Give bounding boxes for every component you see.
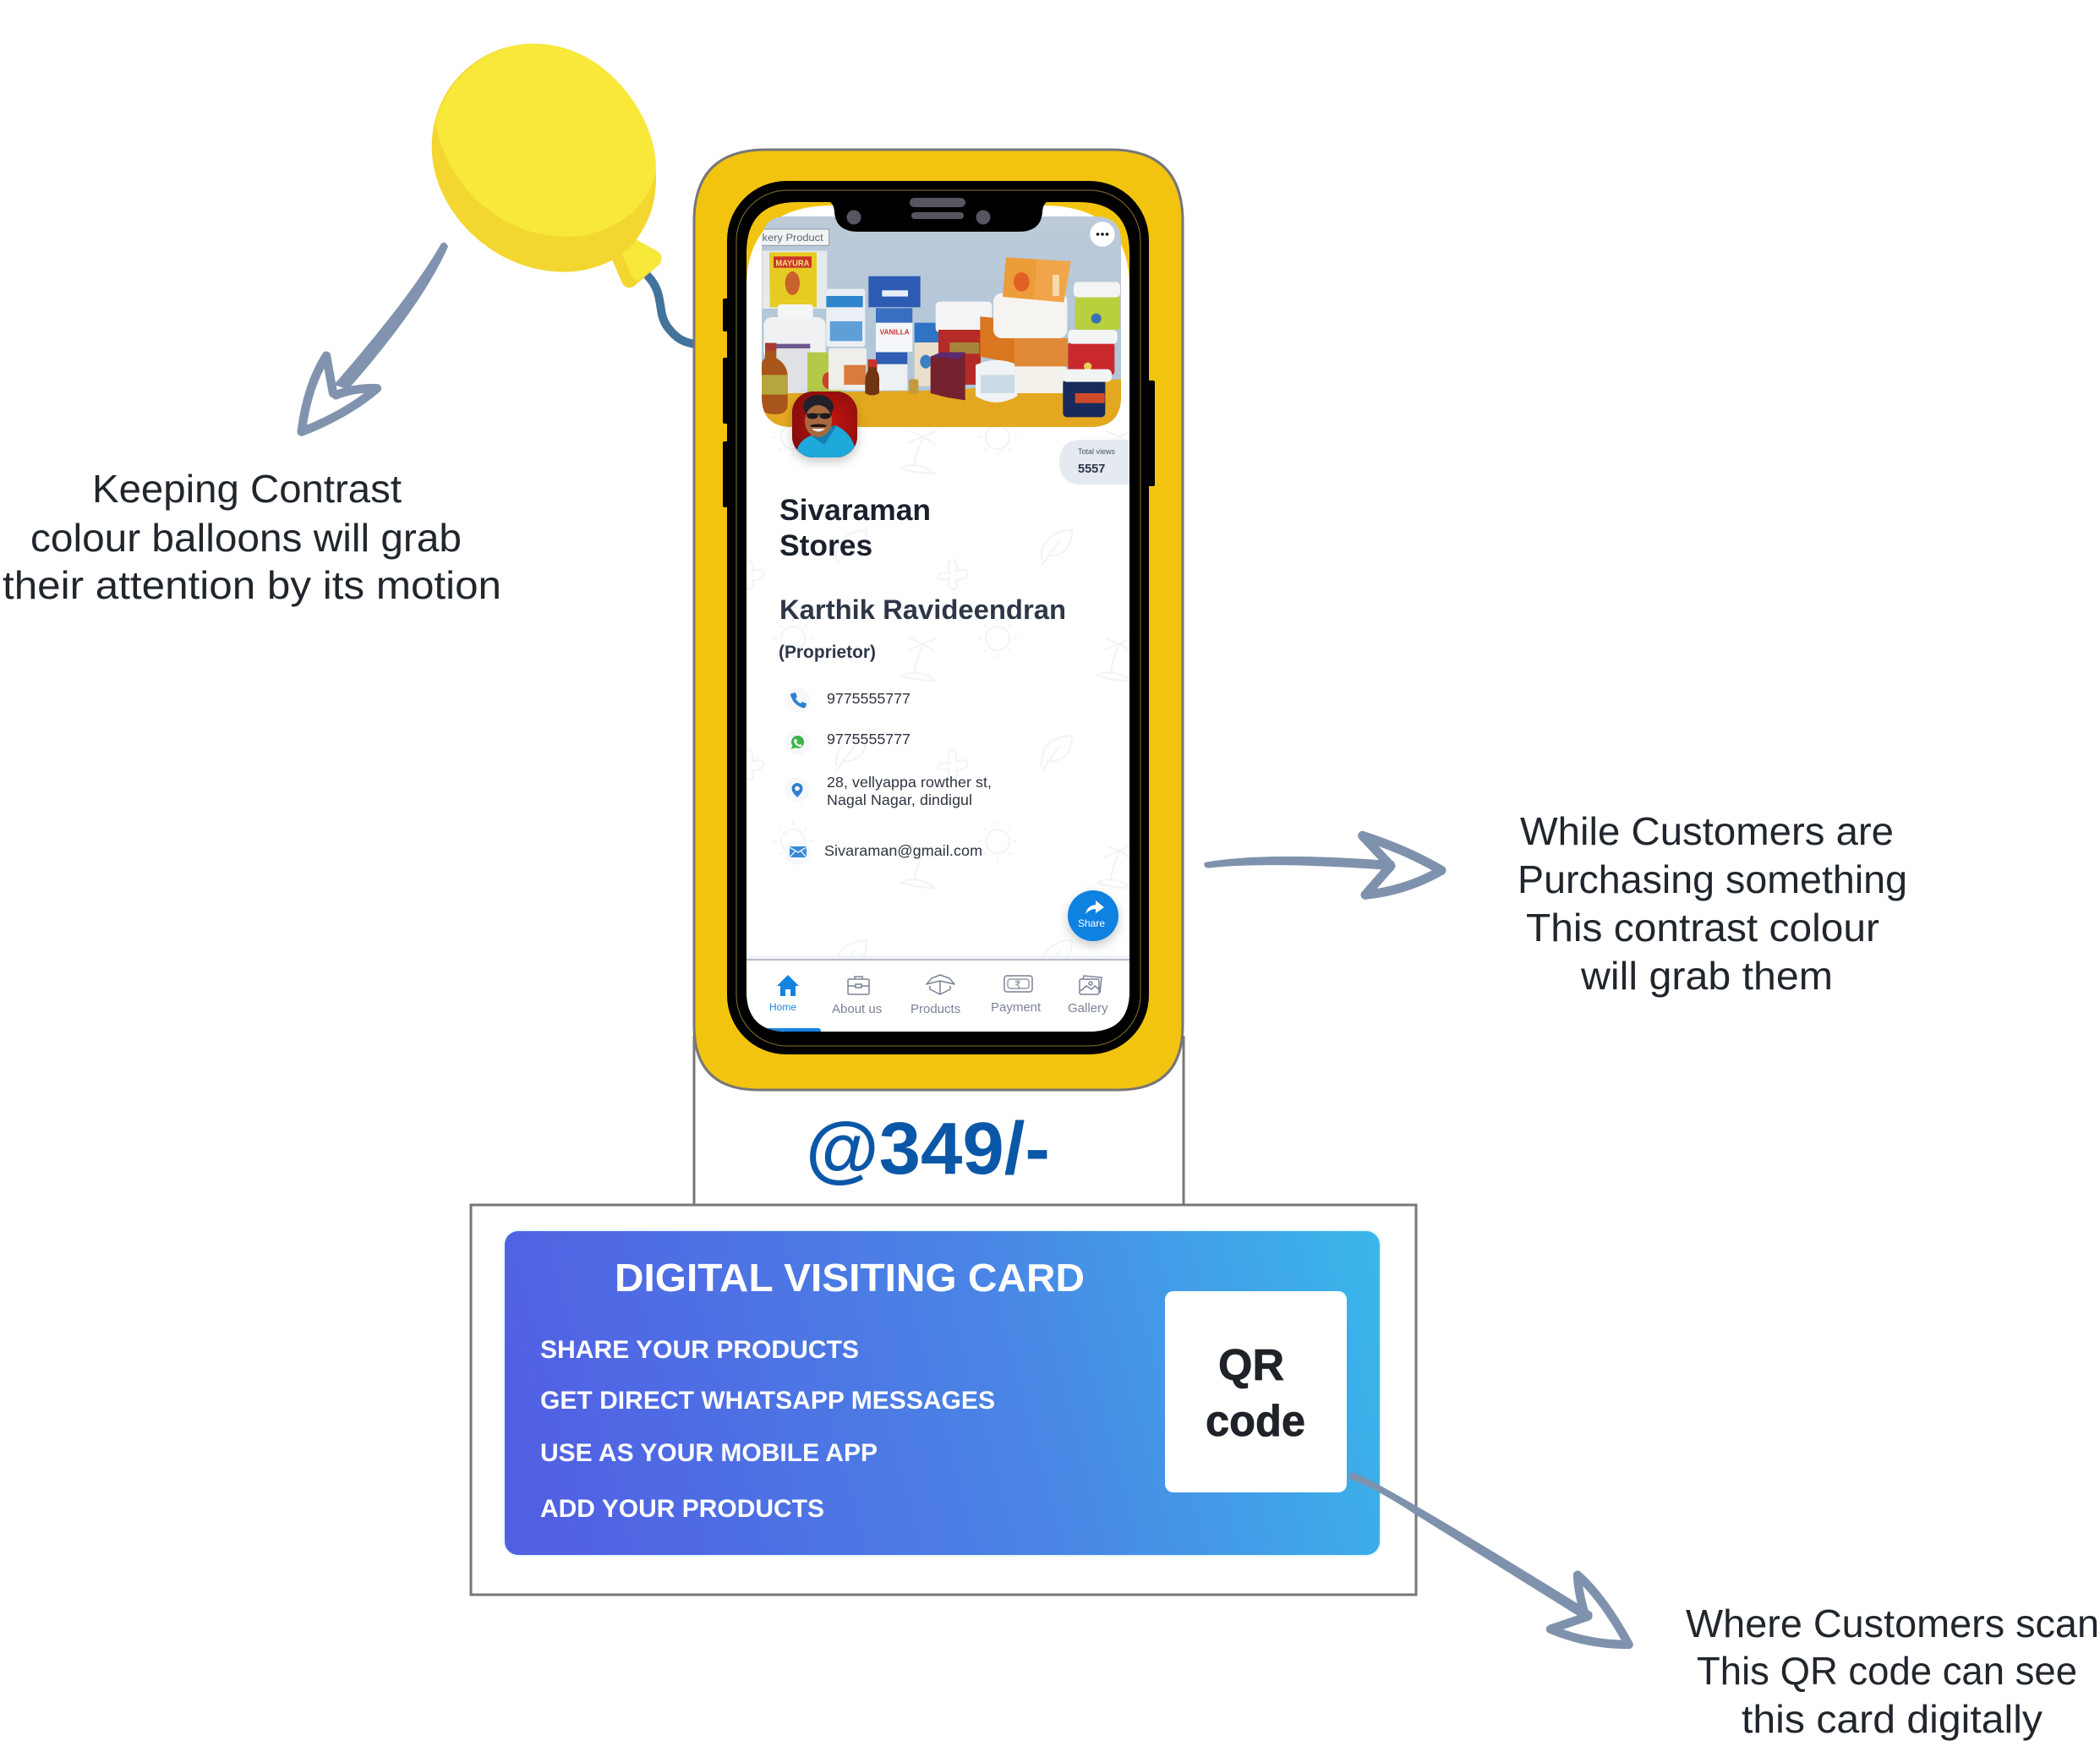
caption: QR scan xyxy=(1686,1601,2099,1741)
total views pill: 5557 xyxy=(1078,463,1105,476)
contact: whatsapp xyxy=(785,730,911,755)
caption: purchasing: While Customers are xyxy=(1520,809,1894,853)
contact: email xyxy=(785,840,982,865)
caption: QR scan: This QR code can see xyxy=(1697,1649,2077,1693)
QR code placeholder: QR xyxy=(1218,1341,1284,1390)
nav: about us: About us xyxy=(832,1002,882,1016)
icon: balloon string xyxy=(647,275,696,344)
card feature list: ADD YOUR PRODUCTS xyxy=(540,1495,824,1523)
product photo: MAYURA xyxy=(775,259,809,268)
photo caption tag xyxy=(762,229,829,245)
arrow: balloon to caption xyxy=(302,243,448,432)
share button: Share xyxy=(1078,917,1105,929)
phone black bezel xyxy=(727,181,1149,1054)
card heading: DIGITAL VISITING CARD xyxy=(615,1256,1085,1300)
contact: whatsapp: 9775555777 xyxy=(827,731,911,747)
background doodles xyxy=(735,418,1133,976)
caption: balloons: colour balloons will grab xyxy=(30,516,462,560)
screen xyxy=(735,205,1133,1035)
caption: purchasing: Purchasing something xyxy=(1518,857,1907,901)
caption: QR scan: this card digitally xyxy=(1742,1697,2043,1741)
contact: address: Nagal Nagar, dindigul xyxy=(827,791,972,808)
product photo xyxy=(761,216,1122,428)
nav: payment xyxy=(991,976,1042,1015)
phone side buttons xyxy=(723,298,1155,507)
nav: active indicator xyxy=(768,1028,821,1032)
nav: about us xyxy=(832,977,882,1016)
share button xyxy=(1068,890,1118,941)
price: @349/- xyxy=(806,1108,1050,1190)
table xyxy=(761,379,1122,427)
product photo: kery Product xyxy=(763,232,823,244)
card feature list xyxy=(540,1336,995,1523)
caption: balloons: Keeping Contrast xyxy=(92,467,402,511)
caption: balloons xyxy=(3,467,501,607)
total views pill xyxy=(1059,440,1133,485)
caption: purchasing: This contrast colour xyxy=(1526,906,1879,950)
nav: home: Home xyxy=(769,1001,796,1013)
phone yellow case xyxy=(694,150,1183,1090)
profile avatar xyxy=(792,391,857,457)
QR code placeholder: code xyxy=(1206,1397,1305,1446)
price frame lines xyxy=(694,1036,1184,1205)
nav: products xyxy=(911,975,960,1016)
business name xyxy=(780,499,929,556)
proprietor role: (Proprietor) xyxy=(779,642,876,662)
arrow: phone to caption xyxy=(1204,835,1441,895)
bottom navigation xyxy=(746,955,1129,1035)
nav: products: Products xyxy=(911,1002,960,1016)
nav: gallery xyxy=(1068,976,1108,1016)
proprietor name: Karthik Ravideendran xyxy=(779,594,1066,625)
caption: purchasing xyxy=(1518,809,1907,998)
contact: phone xyxy=(785,687,911,713)
nav: gallery: Gallery xyxy=(1068,1001,1108,1016)
business name: Stores xyxy=(779,528,872,562)
caption: QR scan: Where Customers scan xyxy=(1686,1601,2099,1645)
card feature list: SHARE YOUR PRODUCTS xyxy=(540,1336,859,1364)
total views pill: Total views xyxy=(1078,447,1115,456)
arrow: QR code to caption xyxy=(1348,1473,1629,1645)
product photo: VANILLA xyxy=(880,329,910,337)
nav: payment: Payment xyxy=(991,1000,1042,1015)
caption: balloons: their attention by its motion xyxy=(3,563,501,607)
panel: gradient visiting card xyxy=(503,1229,1381,1557)
QR code placeholder xyxy=(1165,1291,1347,1492)
contact: phone: 9775555777 xyxy=(827,690,911,707)
phone notch xyxy=(829,194,1048,232)
nav: payment: ₹ xyxy=(1014,979,1021,991)
icon: more menu xyxy=(1090,222,1115,247)
icon: yellow balloon xyxy=(432,44,662,287)
contact: email: Sivaraman@gmail.com xyxy=(824,842,982,859)
card feature list: GET DIRECT WHATSAPP MESSAGES xyxy=(540,1387,995,1415)
card feature list: USE AS YOUR MOBILE APP xyxy=(540,1439,878,1467)
contact: address: 28, vellyappa rowther st, xyxy=(827,774,992,791)
nav: home xyxy=(769,975,799,1013)
business name: Sivaraman xyxy=(779,493,931,527)
contact: address xyxy=(785,774,992,808)
panel: visiting card frame xyxy=(471,1205,1416,1595)
phone mockup xyxy=(694,150,1183,1090)
screen yellow corners xyxy=(746,202,1129,296)
caption: purchasing: will grab them xyxy=(1580,954,1833,998)
